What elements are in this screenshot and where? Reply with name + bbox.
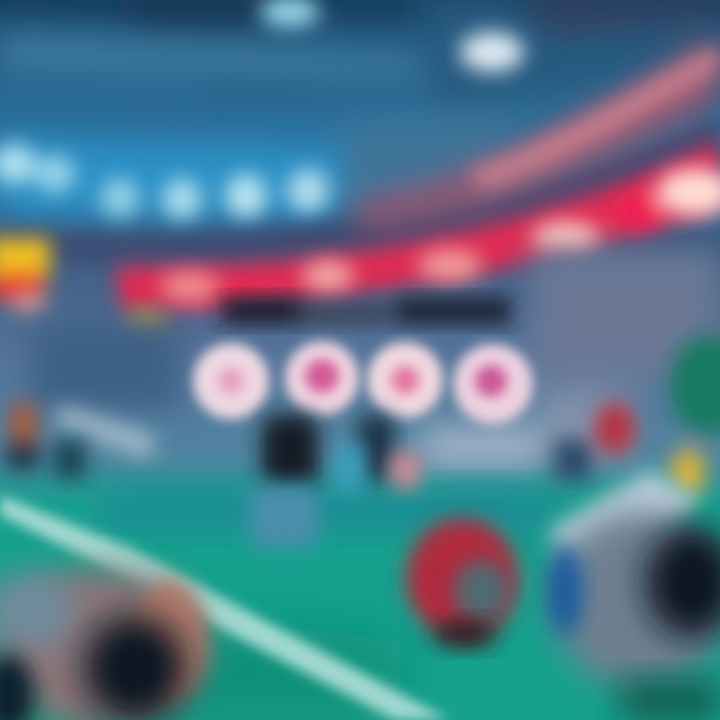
stand lights xyxy=(0,0,524,220)
curved upper red band xyxy=(350,35,720,230)
helmet: right foreground xyxy=(547,470,720,720)
central players xyxy=(250,415,421,547)
right background figures xyxy=(555,335,720,496)
left colored sign xyxy=(0,238,50,314)
helmet: red centre xyxy=(406,518,518,648)
LED ribbon xyxy=(115,140,720,314)
field xyxy=(0,500,720,720)
upper stands xyxy=(0,0,720,215)
helmet: bottom left xyxy=(0,568,206,720)
dark band above LED ribbon xyxy=(0,115,720,263)
round pink signs xyxy=(193,341,533,424)
left white banner xyxy=(55,405,155,460)
small figures on the left xyxy=(5,400,85,480)
field line xyxy=(0,495,450,720)
mid stands xyxy=(30,250,720,470)
dark patches under ribbon xyxy=(222,298,513,324)
